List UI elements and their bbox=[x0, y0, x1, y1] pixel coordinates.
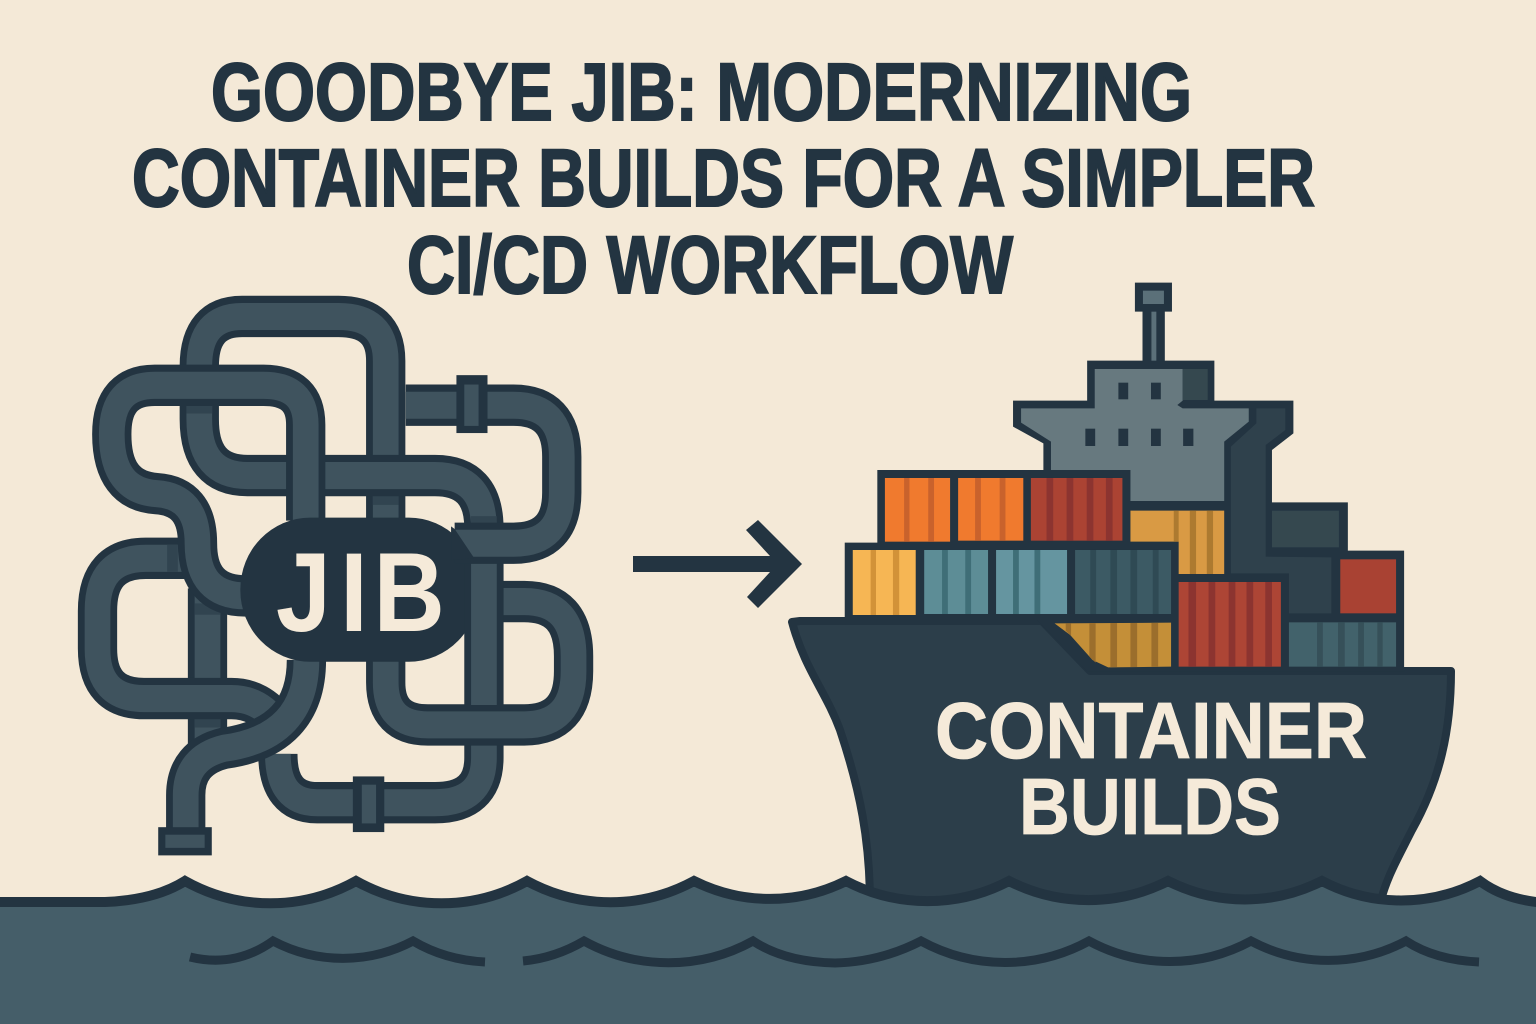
hull label: CONTAINER bbox=[935, 686, 1367, 775]
JIB pill bbox=[240, 518, 479, 662]
sea with waves bbox=[0, 881, 1536, 1024]
title: CI/CD WORKFLOW bbox=[407, 220, 1013, 311]
hull label: BUILDS bbox=[1019, 762, 1281, 851]
hull bbox=[792, 621, 1451, 905]
title: GOODBYE JIB: MODERNIZING bbox=[211, 47, 1192, 138]
tangled pipes with JIB label: JIB bbox=[276, 531, 445, 655]
containers top row bbox=[885, 478, 1224, 574]
tangled pipes with JIB label bbox=[97, 316, 574, 855]
inner waves bbox=[190, 941, 1479, 963]
container ship bbox=[792, 283, 1451, 905]
hull label bbox=[935, 686, 1367, 851]
containers middle row bbox=[853, 550, 1171, 615]
arrow bbox=[633, 520, 802, 608]
ship superstructure bbox=[845, 283, 1404, 672]
title bbox=[132, 47, 1315, 311]
containers lower row bbox=[1055, 559, 1396, 667]
